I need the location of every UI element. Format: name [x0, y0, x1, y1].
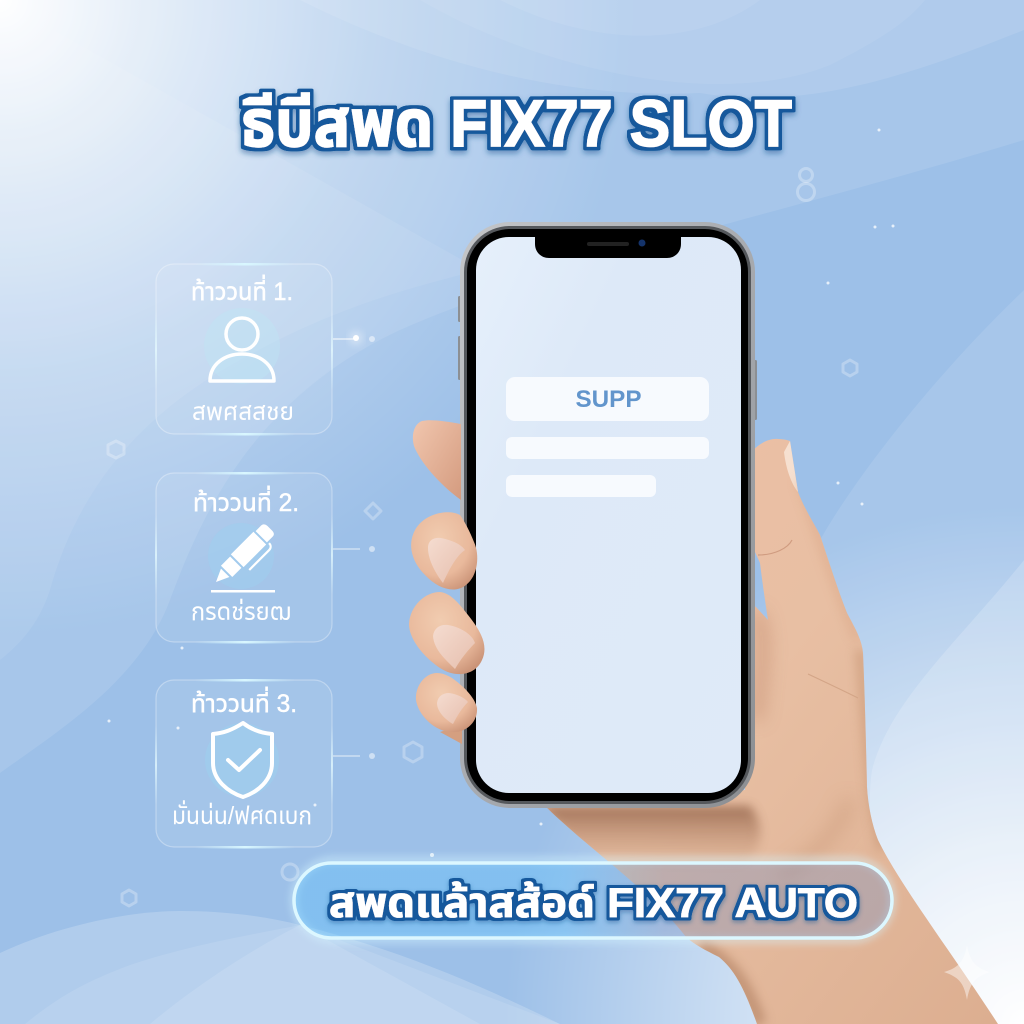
icon: user: [204, 308, 280, 384]
title: ธีบีสพด FIX77 SLOT: [241, 86, 792, 160]
connector 2: [333, 546, 375, 552]
icon: shield: [205, 723, 279, 797]
icon: pen: [208, 522, 280, 593]
middle finger: [411, 512, 477, 590]
phone screen: [476, 237, 741, 793]
step 2 heading: ท้าววนที่ 2.: [193, 485, 299, 517]
index finger: [413, 420, 461, 500]
screen field: SUPP: [506, 377, 709, 421]
palm sliver: [440, 725, 462, 744]
callout text: สพดแล้าสส้อด์ FIX77 AUTO: [329, 879, 858, 926]
panel: step 3: [155, 679, 333, 848]
screen field bar: [506, 437, 709, 459]
panel: step 2: [155, 472, 333, 644]
phone notch: [535, 236, 681, 258]
panel: step 1: [155, 263, 333, 436]
step 1 label: สพศสสชย: [192, 398, 294, 426]
callout pill: [294, 860, 892, 940]
phone: [458, 222, 757, 808]
decorative particles: [108, 128, 894, 906]
little finger: [416, 673, 477, 732]
step 2 label: กรดช่รยฒ: [191, 598, 291, 626]
fingers: [409, 420, 484, 744]
screen field short bar: [506, 475, 656, 497]
step 3 label: มั่นน่น/ฟศดเบก: [172, 799, 312, 830]
thumb nail: [784, 441, 798, 492]
step 1 heading: ท้าววนที่ 1.: [191, 274, 293, 306]
hand and wrist: [540, 439, 998, 1024]
screen field: SUPP: SUPP: [576, 386, 642, 413]
connector 3: [333, 753, 375, 759]
ring finger: [409, 592, 484, 674]
icon: corner sparkle: [944, 945, 990, 1000]
step 3 heading: ท้าววนที่ 3.: [191, 686, 297, 718]
connector 1: [333, 331, 375, 345]
